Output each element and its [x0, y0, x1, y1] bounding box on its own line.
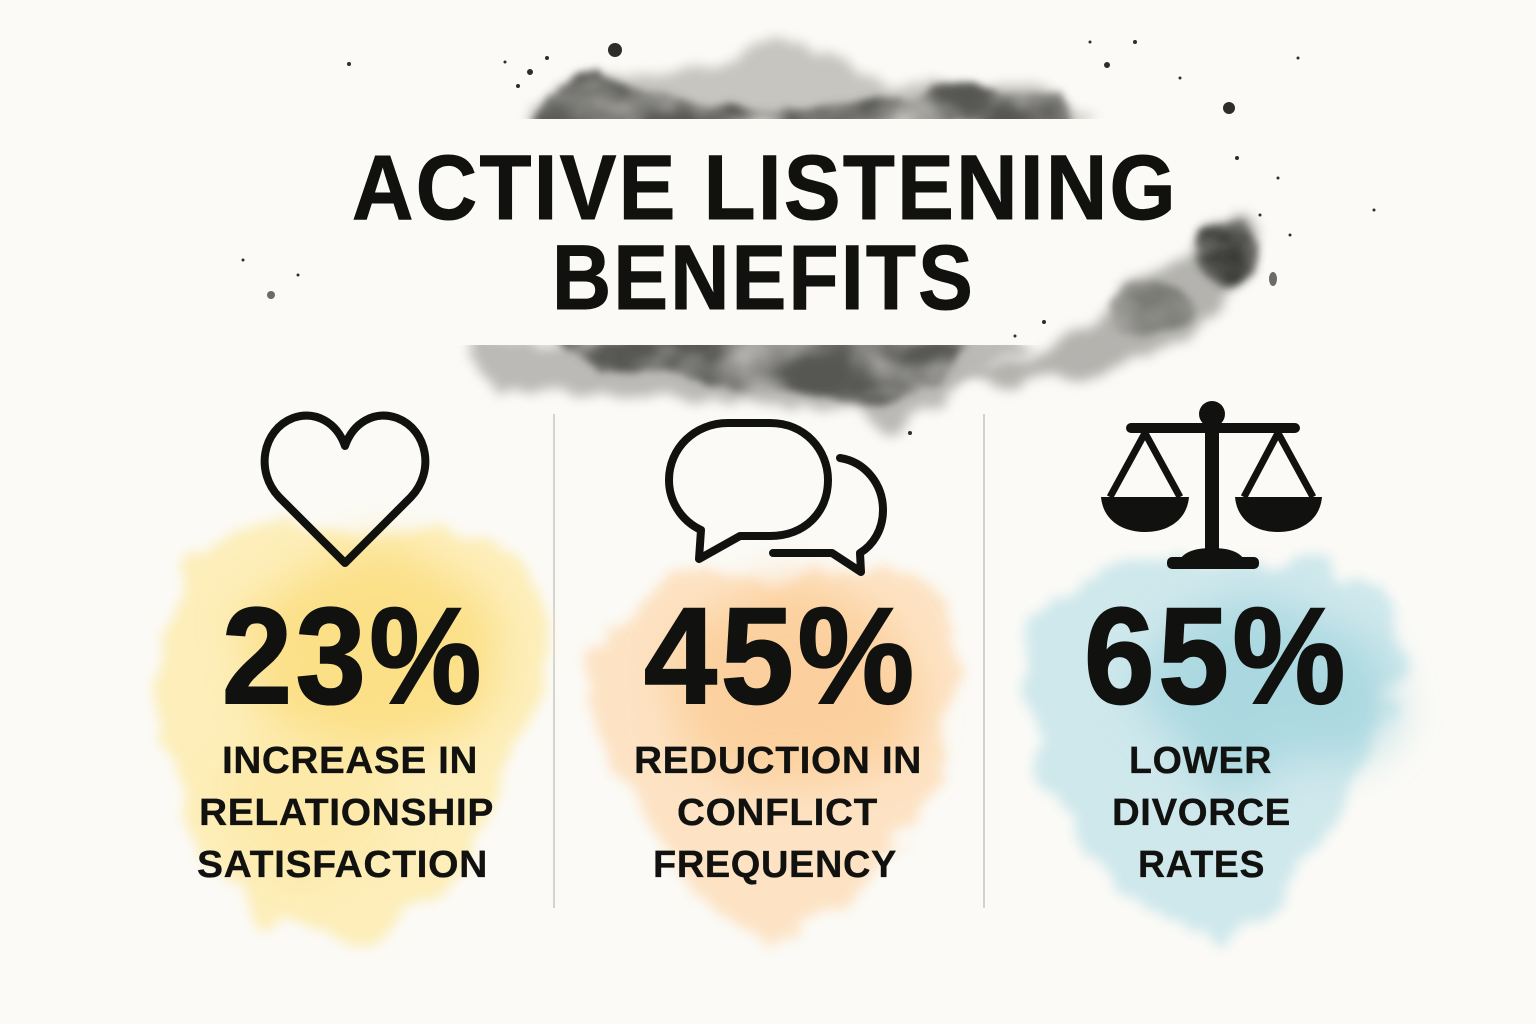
stat: 23%: 23%	[222, 580, 485, 733]
panel: conflict frequency	[591, 423, 956, 939]
label: reduction in conflict frequency: CONFLICT	[677, 792, 878, 834]
label: increase in relationship satisfaction	[197, 740, 494, 886]
stat: 65%: 65%	[1084, 580, 1349, 733]
ink wash behind title	[242, 40, 1376, 437]
blue watercolor blob	[1018, 559, 1401, 938]
ink splatter	[242, 40, 1376, 435]
label: lower divorce rates: DIVORCE	[1112, 792, 1291, 834]
title	[352, 137, 1178, 329]
title: BENEFITS	[552, 227, 975, 329]
label: lower divorce rates	[1112, 740, 1291, 886]
title: ACTIVE LISTENING	[352, 137, 1178, 239]
label: lower divorce rates: LOWER	[1129, 740, 1272, 782]
orange watercolor blob	[591, 571, 956, 939]
panel: relationship satisfaction	[157, 416, 549, 941]
label: reduction in conflict frequency: FREQUENCY	[653, 844, 897, 886]
column dividers	[553, 414, 555, 908]
yellow watercolor blob	[157, 523, 549, 941]
label: lower divorce rates: RATES	[1138, 844, 1265, 886]
stat: 45%: 45%	[644, 580, 918, 733]
label: increase in relationship satisfaction: RELATIONSHIP	[199, 792, 494, 834]
icon: scales	[1101, 401, 1322, 569]
label: increase in relationship satisfaction: INCREASE IN	[222, 740, 478, 782]
panel: divorce rates	[1018, 401, 1401, 938]
label: reduction in conflict frequency: REDUCTION IN	[634, 740, 922, 782]
ink swoosh	[940, 218, 1258, 384]
paper band	[440, 119, 1220, 345]
icon: speech bubbles	[669, 423, 883, 572]
label: increase in relationship satisfaction: SATISFACTION	[197, 844, 488, 886]
icon: heart	[265, 416, 425, 563]
label: reduction in conflict frequency	[634, 740, 922, 886]
